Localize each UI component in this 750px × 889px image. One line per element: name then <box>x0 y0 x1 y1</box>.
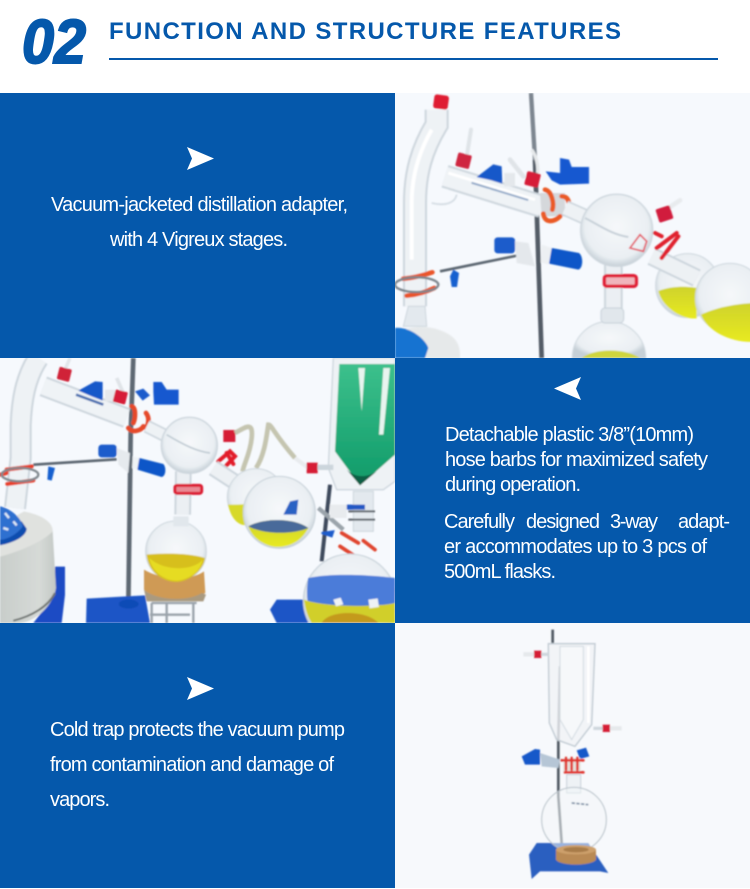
text block: 3-way adapter: Carefully <box>444 511 515 533</box>
title underline <box>109 58 718 60</box>
text block: 3-way adapter: adapt- <box>678 511 730 533</box>
text block: cold trap description <box>50 719 345 811</box>
text block: cold trap description: Cold trap protects the vacuum pump <box>50 719 345 741</box>
title: FUNCTION AND STRUCTURE FEATURES <box>109 18 621 45</box>
section number: 02 <box>22 8 86 77</box>
icon: right arrow <box>187 677 214 700</box>
icon: left arrow <box>554 377 581 400</box>
text block: 3-way adapter: er accommodates up to 3 pcs of <box>444 536 707 558</box>
text block: adapter description: with 4 Vigreux stages. <box>109 229 288 251</box>
text block: 3-way adapter: designed <box>526 511 600 533</box>
text block: cold trap description: vapors. <box>50 789 110 811</box>
text block: 3-way adapter: 500mL flasks. <box>444 561 556 583</box>
heating mantle <box>0 506 65 623</box>
text block: hose barbs: Detachable plastic 3/8”(10mm) <box>445 424 694 446</box>
text block: adapter description: Vacuum-jacketed distillation adapter, <box>51 194 348 216</box>
photo: short path distillation setup <box>0 358 395 623</box>
icon: right arrow <box>187 147 214 170</box>
text block: hose barbs: during operation. <box>445 474 581 496</box>
panel: cold trap text <box>0 623 395 888</box>
text block: adapter description <box>51 194 348 251</box>
panel: hose barbs and adapter text <box>395 358 750 623</box>
text block: hose barbs: hose barbs for maximized safety <box>445 449 708 471</box>
text block: cold trap description: from contamination and damage of <box>50 754 334 776</box>
text block: 3-way adapter: 3-way <box>610 511 658 533</box>
photo: cold trap <box>520 628 623 880</box>
section header <box>22 8 718 77</box>
text block: hose barbs <box>445 424 708 496</box>
photo: distillation head close-up <box>395 93 750 358</box>
text block: 3-way adapter <box>444 511 730 583</box>
panel: distillation adapter text <box>0 93 395 358</box>
